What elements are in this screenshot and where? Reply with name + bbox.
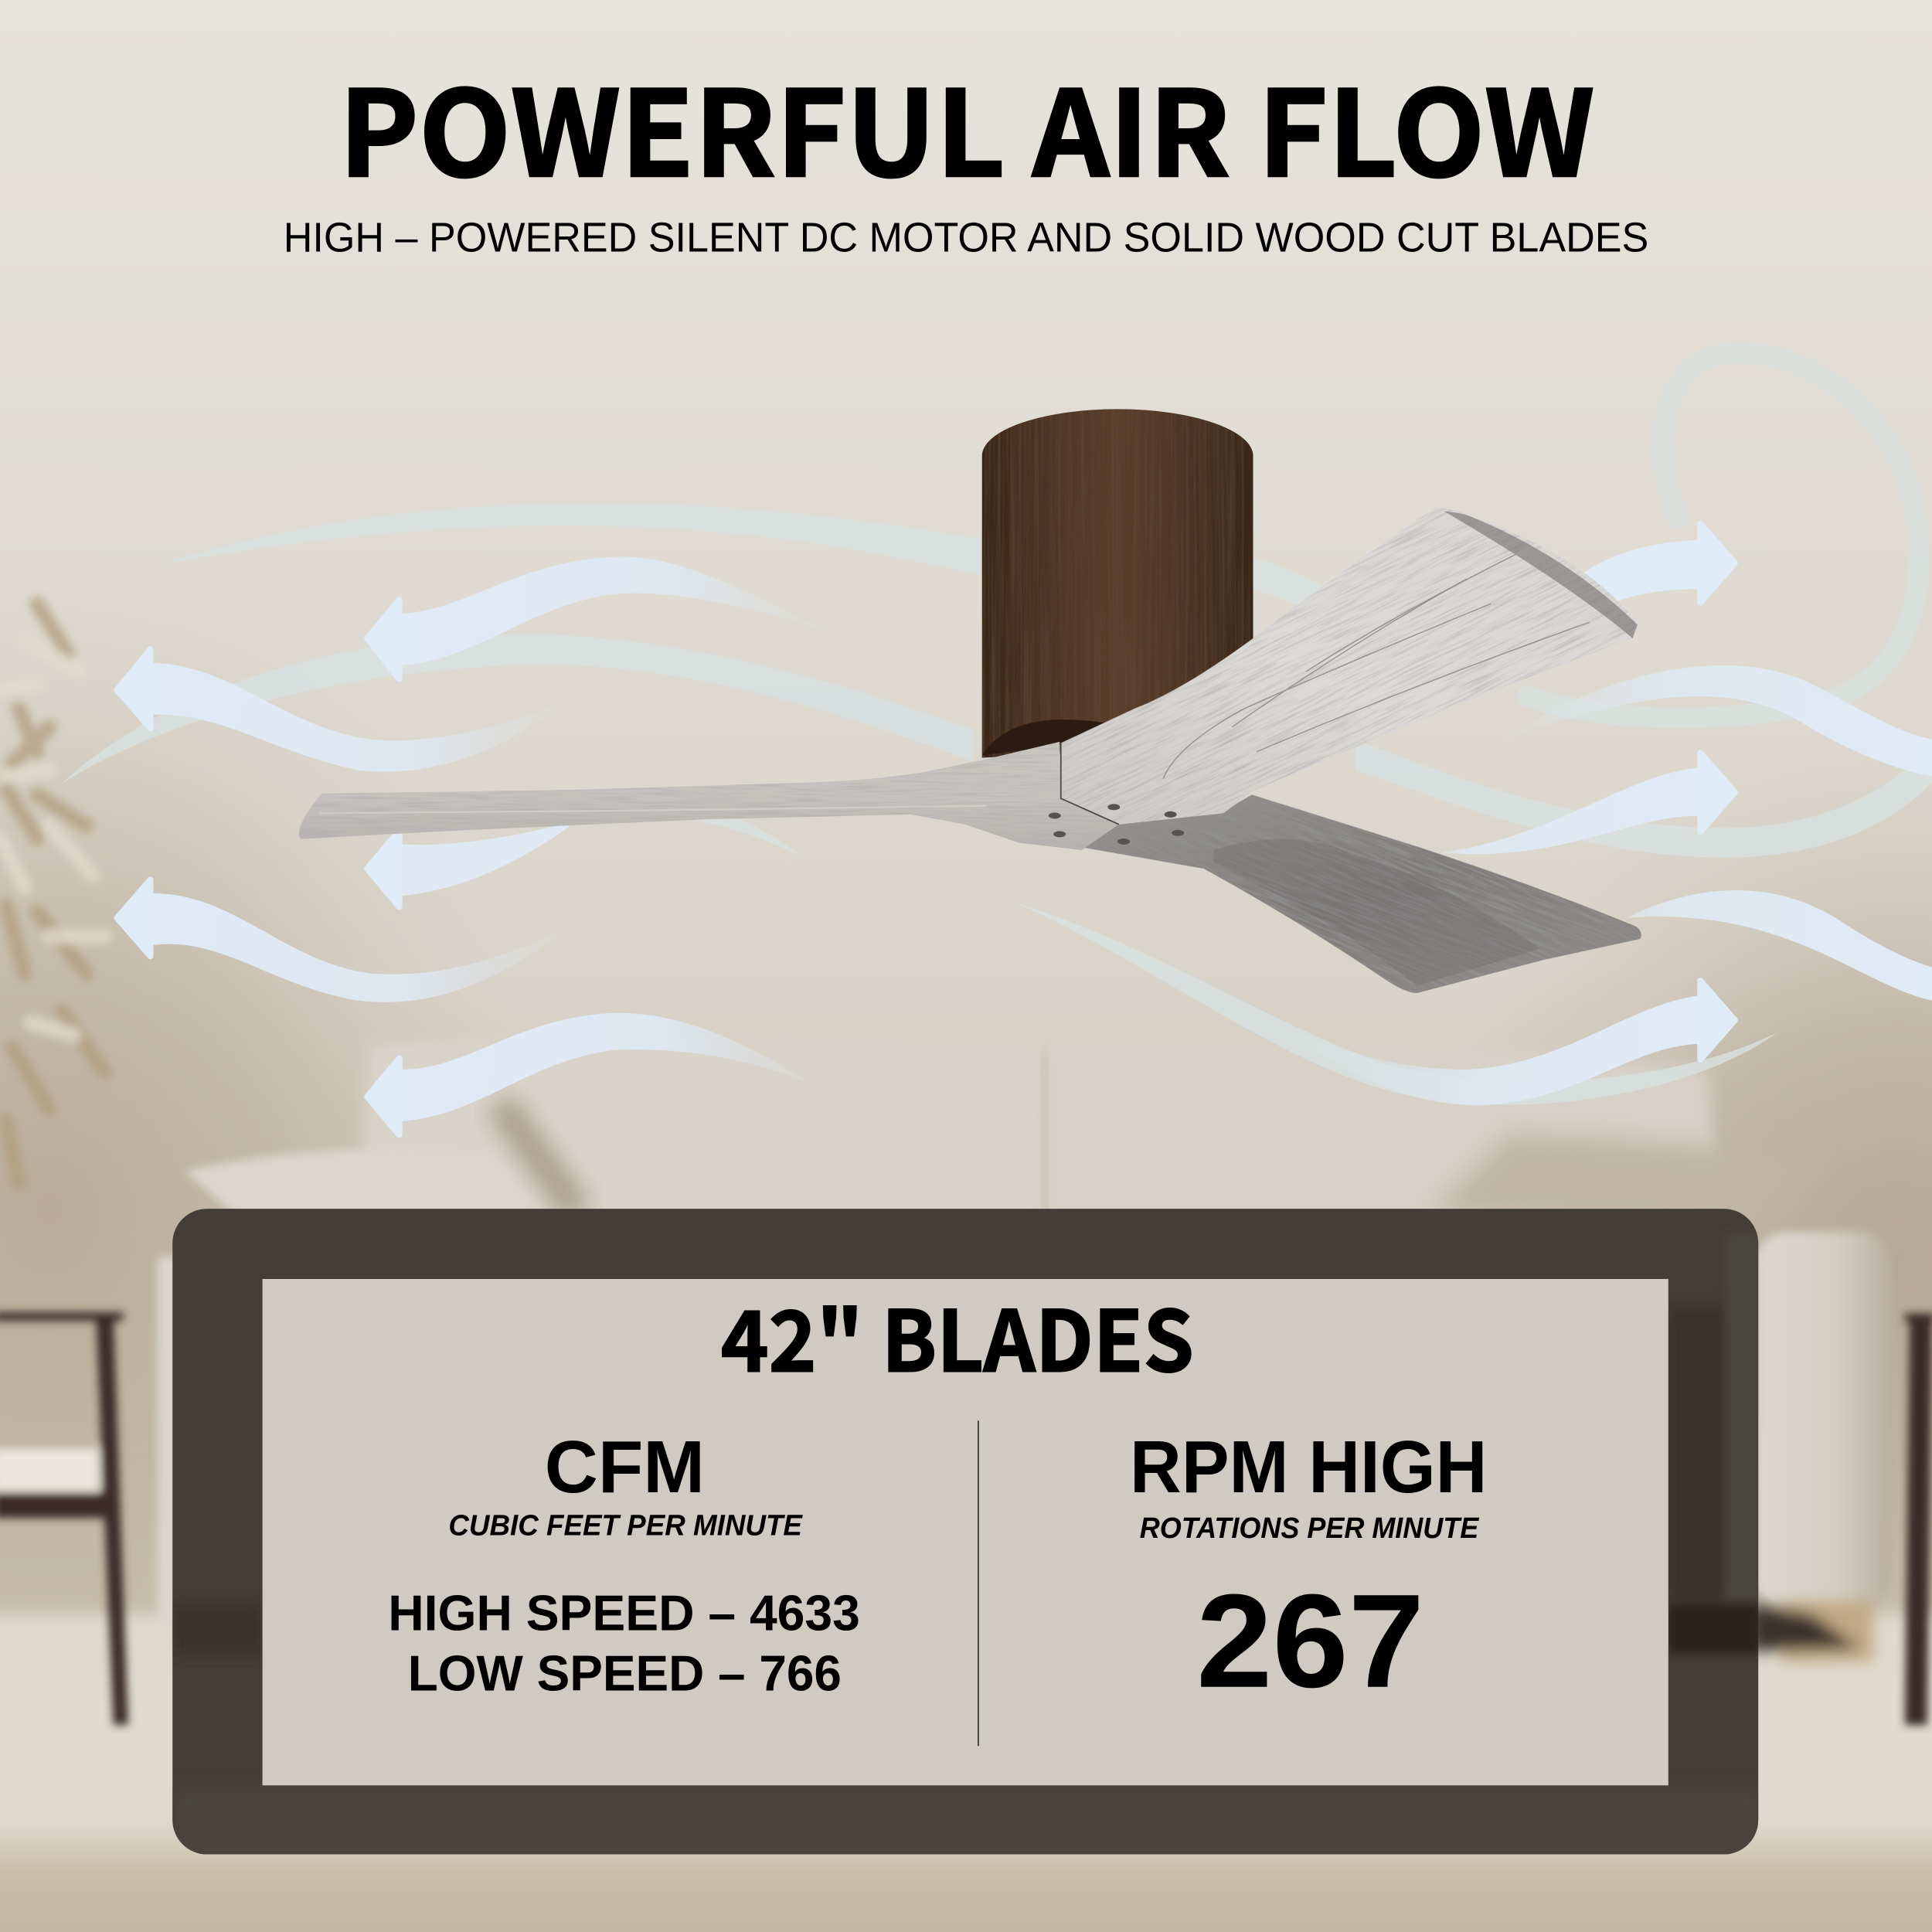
CFM column: HIGH SPEED – 4633 [388,1584,860,1641]
fan motor housing [982,409,1253,758]
arrow right 2 [1441,753,1735,854]
title: POWERFUL AIR FLOW [338,39,1594,211]
left armrest [158,1257,195,1627]
airflow arrows pointing right [1269,524,1932,1105]
RPM column: ROTATIONS PER MINUTE [1140,1512,1480,1545]
arrow left 4 [117,879,566,1002]
arrow left 5 [367,1013,813,1134]
left blade [299,742,1119,850]
left blade ridge [319,806,986,813]
CFM column [388,1426,860,1702]
lower centre swirl band [1016,903,1777,1105]
arrow left 2 [367,557,838,679]
right long swirl band [1355,740,1932,858]
warm wall shade left [0,566,543,1849]
right armrest [1756,1232,1891,1608]
left pillow [185,1148,554,1232]
RPM column [1130,1426,1487,1716]
air swirl bands [62,503,1932,1105]
right pillow [1429,1134,1818,1238]
panel see-through shading [172,1232,1762,1861]
lower blade [1015,601,1710,1186]
floor [0,1614,1932,1932]
upper blade grain [1163,554,1590,779]
faint left blade gap swirl [579,788,801,856]
sofa leg and shadow [1750,1602,1872,1661]
warm wall shade right [1429,740,1932,1774]
panel heading: 42" BLADES [721,1275,1194,1396]
arrow right 3 [1269,981,1735,1105]
left chair [0,1312,128,1725]
panel dark frame [172,1209,1758,1855]
panel inner card [263,1279,1668,1785]
RPM column: RPM HIGH [1130,1426,1487,1509]
blade mounting screws [1049,804,1184,845]
arrow left 3 [367,819,579,906]
top right curl swirl [1528,353,1919,718]
CFM column: LOW SPEED – 766 [408,1645,842,1702]
lower blade dark sweep [1213,839,1540,986]
pampas grass [0,604,105,1183]
right back cushion [1047,1040,1725,1244]
edge flow lower [1627,890,1932,1001]
seam between back cushions [1043,1053,1047,1213]
housing underside shadow [982,719,1128,755]
upper blade dark tip [1444,512,1638,638]
middle left swirl band [62,634,974,784]
upper right blade [936,281,1762,1052]
right chair [1905,1314,1932,1725]
subtitle: HIGH – POWERED SILENT DC MOTOR AND SOLID WOOD CUT BLADES [284,214,1648,260]
spec panel [172,1209,1762,1861]
edge flow upper [1503,665,1932,776]
ceiling fan [299,281,1762,1186]
cushion seam shadow [499,1103,579,1213]
arrow right 1 [1583,524,1735,618]
upper joint swirl band [1252,557,1355,628]
upper left swirl band [160,503,986,577]
sofa [158,1039,1891,1627]
CFM column: CFM [545,1426,705,1509]
left back cushion [357,1039,1047,1244]
blade joint line [1061,743,1119,825]
arrow left 1 [117,649,566,772]
RPM column: 267 [1196,1567,1424,1716]
CFM column: CUBIC FEET PER MINUTE [448,1509,803,1543]
airflow arrows pointing left [117,557,838,1134]
